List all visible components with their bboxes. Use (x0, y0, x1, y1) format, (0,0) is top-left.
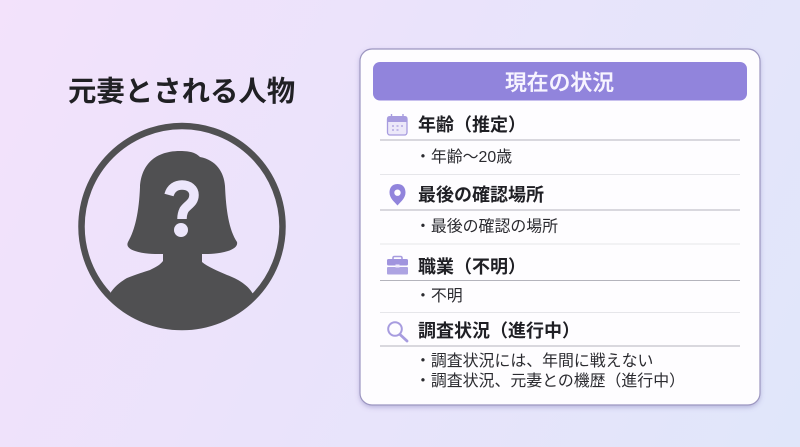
icon: magnifier (388, 322, 407, 341)
body text: ・年齢～20歳 (415, 148, 512, 166)
body text: ・調査状況には、年間に戦えない (415, 352, 653, 370)
body text (415, 352, 685, 390)
section: last seen location (380, 184, 740, 236)
section: investigation status (380, 321, 740, 390)
panel header: 現在の状況 (505, 70, 614, 95)
icon: briefcase (387, 256, 408, 274)
card background (360, 49, 760, 405)
heading: 最後の確認場所 (418, 185, 544, 205)
body text: ・最後の確認の場所 (415, 218, 558, 236)
icon: calendar (387, 114, 408, 135)
icon: map pin (390, 184, 406, 206)
avatar circle (82, 126, 282, 327)
heading: 職業（不明） (418, 257, 526, 277)
panel header (373, 62, 747, 100)
body text: ・不明 (415, 288, 463, 305)
section: occupation (380, 256, 740, 305)
heading: 調査状況（進行中） (418, 321, 580, 341)
question mark (169, 185, 194, 237)
body text: ・調査状況、元妻との機歴（進行中） (415, 372, 685, 390)
title: 元妻とされる人物 (68, 76, 295, 108)
panel: current status (360, 49, 760, 405)
silhouette (111, 151, 253, 340)
section: age (380, 114, 740, 166)
heading: 年齢（推定） (418, 114, 526, 135)
icon: anonymous person silhouette (82, 126, 282, 340)
